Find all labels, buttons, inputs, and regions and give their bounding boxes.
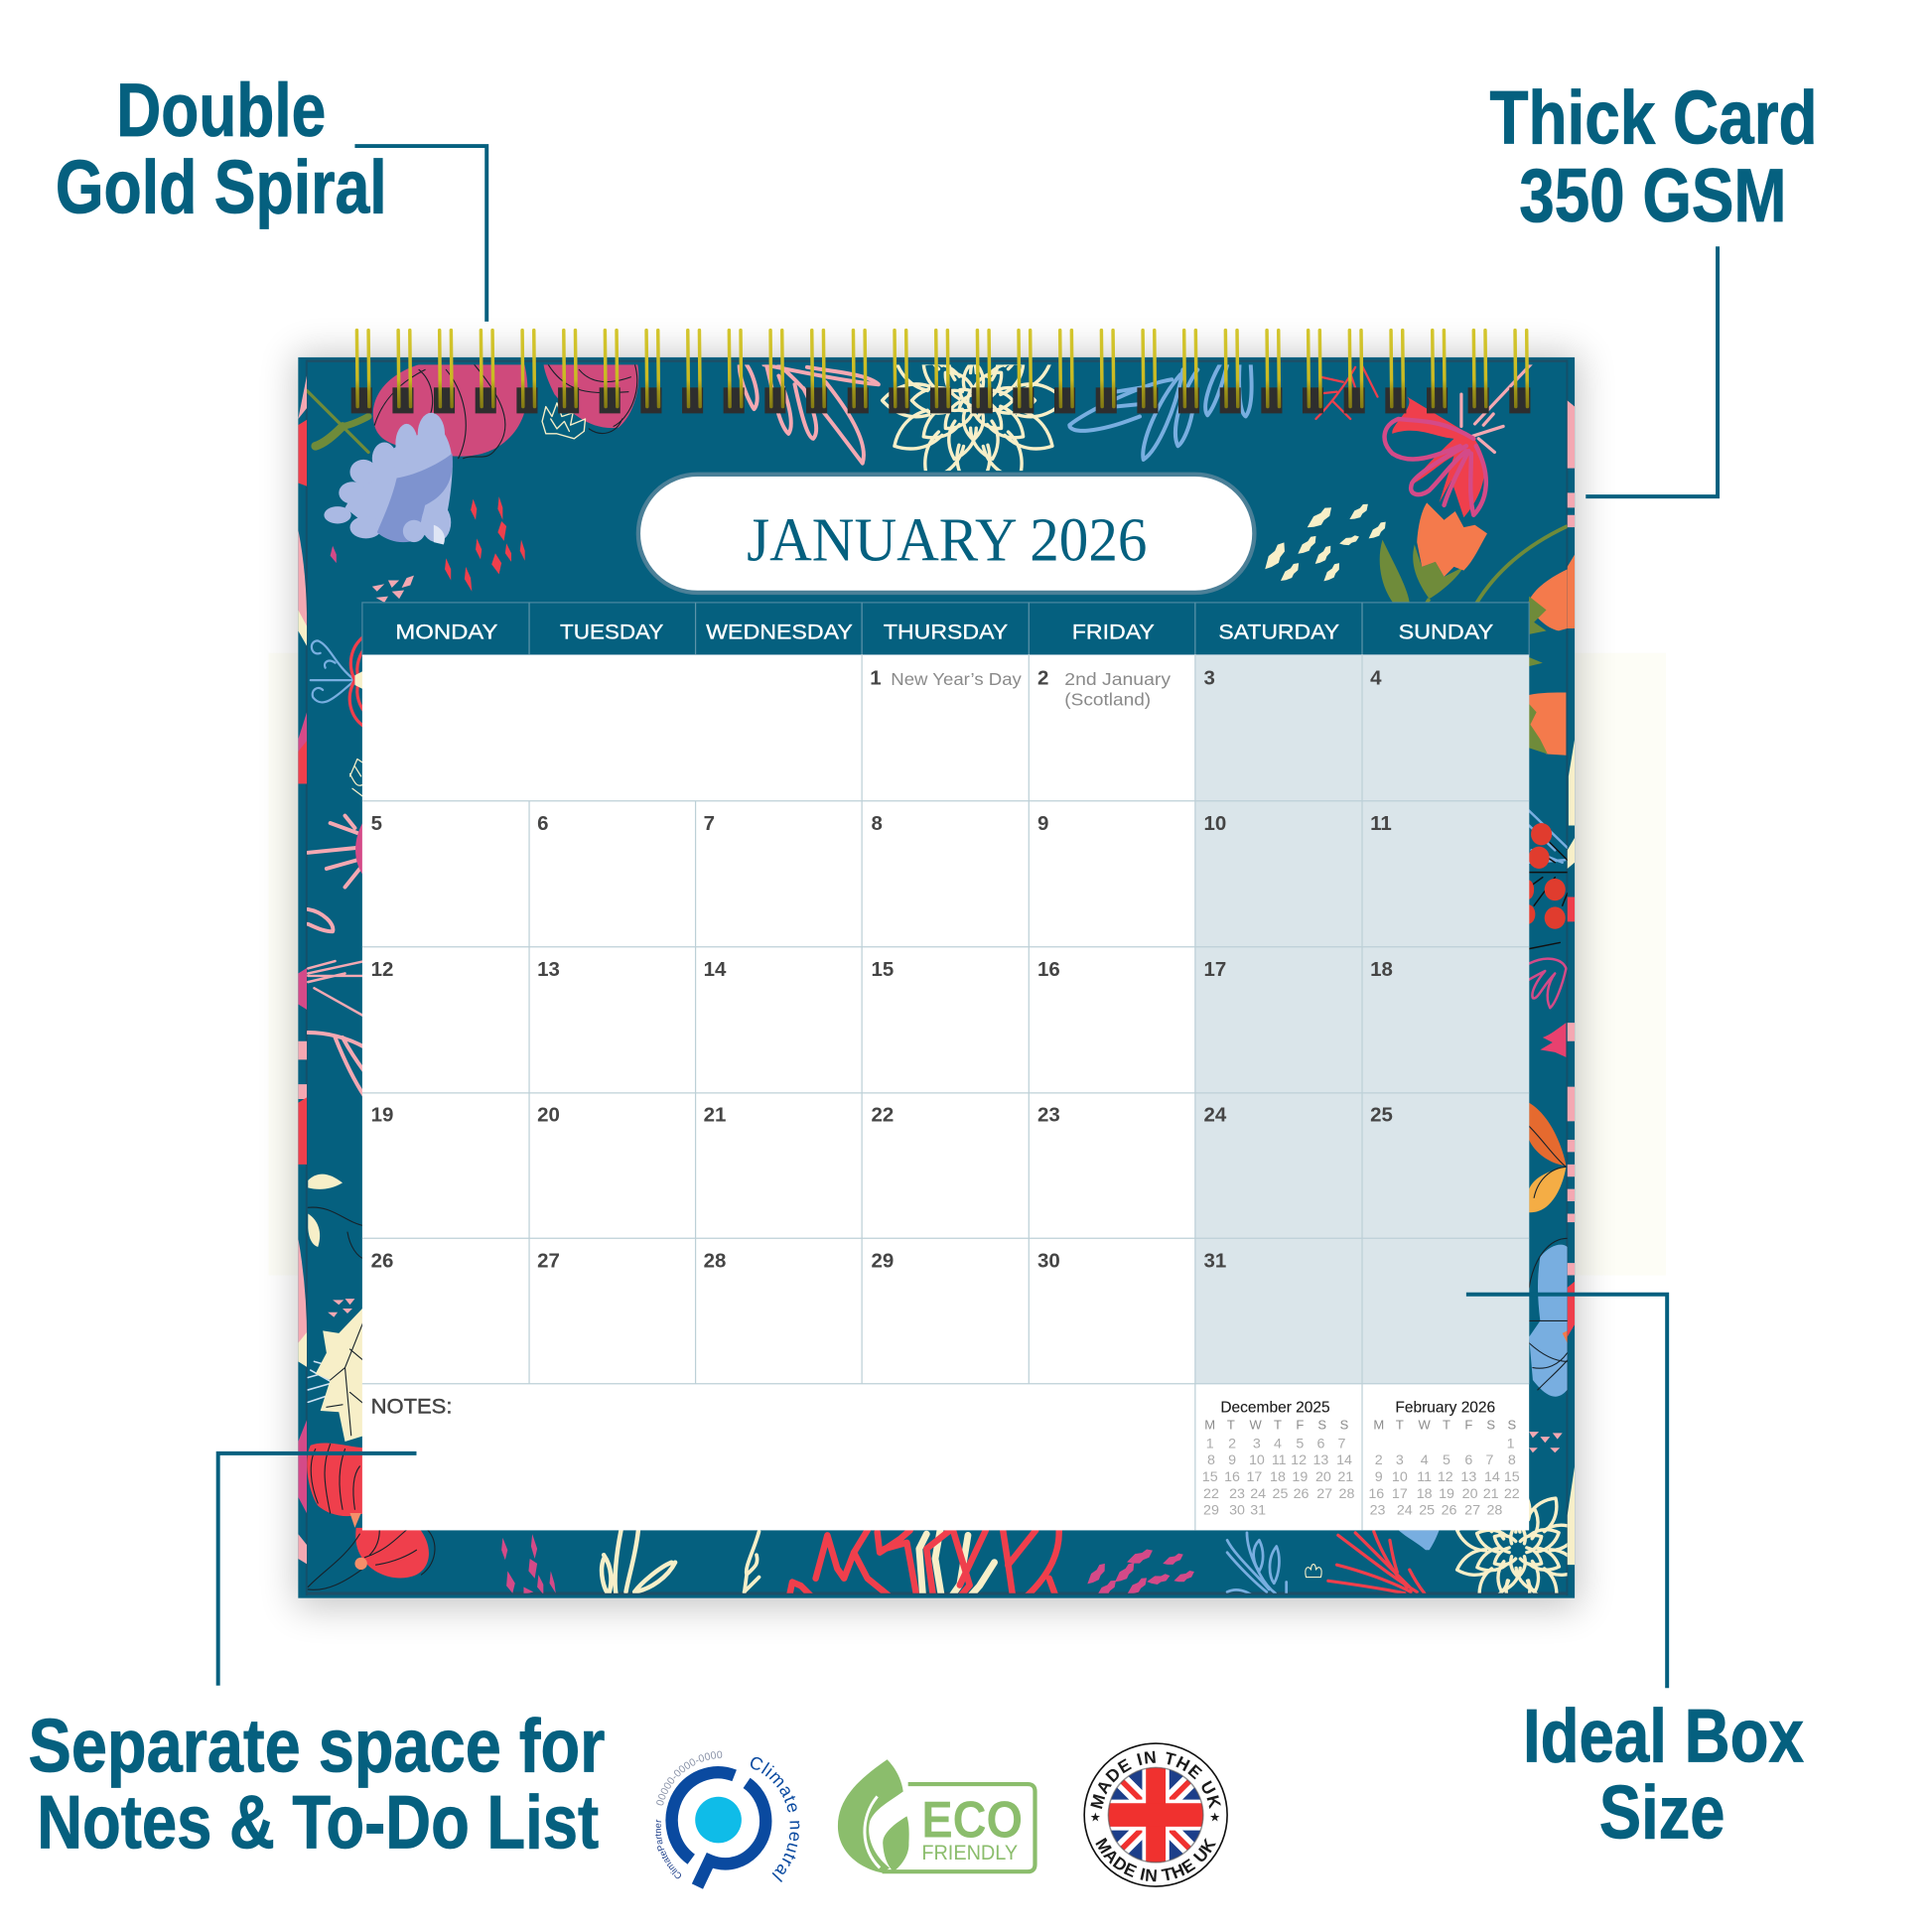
spatter: cream marks <box>1258 503 1389 582</box>
weekday header: TUESDAY <box>560 621 663 643</box>
flower: red and magenta bloom <box>1385 397 1486 517</box>
mini calendar: December 2025: 8 <box>1207 1452 1215 1468</box>
mini calendar: December 2025: 21 <box>1337 1469 1353 1485</box>
badge: climate neutral: ClimatePartner <box>655 1819 681 1878</box>
day numbers: 19 <box>371 1103 393 1126</box>
mini calendar: December 2025: 12 <box>1291 1452 1307 1468</box>
spatter: magenta bottom centre <box>1082 1549 1194 1597</box>
plant: cream sprig bottom <box>745 1532 759 1593</box>
mini calendar: February 2026: 14 <box>1484 1469 1500 1485</box>
plant: blue fern left <box>308 1361 351 1402</box>
mini calendar: February 2026: 22 <box>1504 1486 1520 1502</box>
plant: pink spiky leaves <box>1461 362 1533 452</box>
flag: union jack <box>1103 1762 1208 1867</box>
plant: red berries with blue leaves <box>1520 811 1568 949</box>
mini calendar: December 2025: S <box>1317 1418 1326 1433</box>
mini calendar: February 2026: 3 <box>1396 1452 1404 1468</box>
day numbers: 9 <box>1037 812 1048 835</box>
mini calendar: December 2025: December 2025 <box>1220 1399 1330 1416</box>
mini calendar: December 2025: 10 <box>1249 1452 1265 1468</box>
mini calendar: December 2025: F <box>1296 1418 1304 1433</box>
mini calendar: February 2026: 21 <box>1483 1486 1499 1502</box>
floral illustration <box>307 310 1583 1614</box>
spatter: pink marks <box>372 576 414 603</box>
calendar body <box>298 310 1583 1614</box>
mini calendar: December 2025: 29 <box>1203 1502 1219 1518</box>
day numbers: 15 <box>871 958 894 981</box>
flower: blue petal tip bottom <box>1399 1530 1440 1550</box>
weekday header <box>362 603 1529 655</box>
spatter: red marks <box>445 496 525 592</box>
day numbers: 1 <box>870 666 882 689</box>
mini calendar: December 2025: 22 <box>1203 1486 1219 1502</box>
mini calendar: February 2026: 7 <box>1485 1452 1493 1468</box>
day numbers: 23 <box>1037 1103 1060 1126</box>
mini calendar: December 2025: 28 <box>1339 1486 1354 1502</box>
weekday header: SUNDAY <box>1399 621 1493 643</box>
callout: notes and to-do list: Separate space for <box>29 1705 605 1789</box>
day numbers: 14 <box>704 958 727 981</box>
badge: made in the UK <box>1084 1743 1227 1886</box>
mini calendar: December 2025: 31 <box>1250 1502 1266 1518</box>
day numbers: 12 <box>371 958 393 981</box>
mini calendar: February 2026: 4 <box>1421 1452 1429 1468</box>
mini calendar: February 2026: 13 <box>1460 1469 1476 1485</box>
mini calendar: December 2025: 17 <box>1246 1469 1262 1485</box>
weekday header: SATURDAY <box>1218 621 1339 643</box>
mini calendar: December 2025: 16 <box>1224 1469 1240 1485</box>
mini calendar: December 2025: 26 <box>1294 1486 1310 1502</box>
mini calendar: February 2026: 26 <box>1442 1502 1456 1518</box>
badge: made in the UK: ★ <box>1209 1809 1220 1824</box>
notes label: NOTES: <box>371 1394 452 1419</box>
flower: magenta poppies <box>373 361 638 459</box>
badge: made in the UK: ★ <box>1090 1809 1101 1824</box>
flower: tiny cream lotus <box>1306 1565 1321 1578</box>
plant: left pink sprig <box>308 961 364 1017</box>
plant: green leaf and stem <box>1380 526 1568 617</box>
plant: pink strokes <box>740 364 879 464</box>
day numbers: 5 <box>371 812 382 835</box>
flower: small white chrysanthemum <box>542 403 586 439</box>
date pill <box>638 475 1254 593</box>
callout: ideal box size: Ideal Box <box>1523 1695 1804 1779</box>
badge: eco friendly <box>838 1759 1035 1872</box>
day numbers: 18 <box>1370 958 1393 981</box>
mini calendar: February 2026 <box>1368 1399 1520 1518</box>
day numbers: 8 <box>871 812 883 835</box>
mini calendar: February 2026: W <box>1419 1418 1432 1433</box>
mini calendar: February 2026: 10 <box>1392 1469 1408 1485</box>
callout line: ideal box size <box>1466 1295 1667 1688</box>
mini calendar: December 2025: W <box>1250 1418 1263 1433</box>
day numbers: 25 <box>1370 1103 1393 1126</box>
day numbers: 31 <box>1204 1249 1226 1272</box>
mini calendar: December 2025: 9 <box>1228 1452 1236 1468</box>
badge: climate neutral <box>655 1751 800 1889</box>
calendar cells <box>362 655 1529 1530</box>
mini calendar: February 2026: 18 <box>1417 1486 1433 1502</box>
day numbers: 24 <box>1204 1103 1227 1126</box>
right back-page strip flowers <box>1568 400 1575 1565</box>
day numbers: 26 <box>371 1249 393 1272</box>
mini calendar: February 2026: 6 <box>1464 1452 1472 1468</box>
mini calendar: December 2025: 7 <box>1338 1436 1346 1451</box>
callout: double gold spiral <box>56 69 486 322</box>
day numbers <box>371 666 1393 1272</box>
callout: double gold spiral: Double <box>116 69 326 153</box>
double gold spiral binding <box>351 331 1530 413</box>
plant: left pink star <box>308 816 364 888</box>
day numbers: 30 <box>1037 1249 1060 1272</box>
calendar grid <box>362 603 1529 1530</box>
mini calendar: February 2026: 16 <box>1368 1486 1384 1502</box>
mini calendar: December 2025: 20 <box>1315 1469 1331 1485</box>
flower: red poppy left <box>307 1444 364 1528</box>
flower: orange tulip <box>1413 502 1487 619</box>
pale background band <box>269 653 1666 1276</box>
day numbers: 3 <box>1204 666 1215 689</box>
mini calendar: February 2026: 25 <box>1419 1502 1435 1518</box>
badge: climate neutral: 00000-0000-0000 <box>656 1751 723 1805</box>
holiday labels: (Scotland) <box>1064 690 1151 710</box>
spatter: small pink left <box>328 1299 354 1317</box>
mini calendar: February 2026: 17 <box>1392 1486 1408 1502</box>
callout: ideal box size <box>1523 1695 1804 1856</box>
plant: blue strokes <box>1069 363 1252 460</box>
spatter: magenta bottom left <box>501 1534 556 1594</box>
plant: cream chrysanthemum bottom <box>1453 1486 1583 1614</box>
leaves: orange and yellow <box>1529 1103 1566 1212</box>
day numbers: 28 <box>704 1249 726 1272</box>
mini calendar: February 2026: 11 <box>1417 1469 1432 1485</box>
holiday labels <box>891 669 1171 710</box>
weekday header: MONDAY <box>395 621 497 643</box>
callout line: notes <box>218 1453 416 1686</box>
plant: left pink loop <box>308 909 333 931</box>
badge: made in the UK: MADE IN THE UK <box>1090 1751 1221 1809</box>
holiday labels: New Year’s Day <box>891 669 1022 689</box>
plant: cream chrysanthemum <box>880 364 1054 471</box>
day numbers: 13 <box>537 958 560 981</box>
day numbers: 2 <box>1037 666 1048 689</box>
flower: red poppy bottom <box>308 1528 435 1589</box>
badge: climate neutral: Climate neutral <box>751 1757 800 1882</box>
callout: thick card 350 GSM: 350 GSM <box>1519 154 1787 238</box>
plant: magenta outlined leaves right <box>1529 959 1566 1008</box>
mini calendar: February 2026: 1 <box>1507 1436 1515 1451</box>
day numbers: 22 <box>871 1103 894 1126</box>
mini calendar: December 2025: 2 <box>1228 1436 1236 1451</box>
day numbers: 17 <box>1204 958 1226 981</box>
flower: blue with ink lines <box>1529 1238 1568 1397</box>
badge: made in the UK: MADE IN THE UK <box>1095 1837 1216 1882</box>
day numbers: 27 <box>537 1249 560 1272</box>
mini calendar: December 2025: 30 <box>1229 1502 1245 1518</box>
spatter: magenta mark <box>331 546 337 563</box>
mini calendar: December 2025: 4 <box>1274 1436 1282 1451</box>
card background <box>298 357 1575 1598</box>
mini calendar: December 2025: 5 <box>1296 1436 1304 1451</box>
seeds: cream pods <box>308 1174 364 1259</box>
mini calendar: February 2026: 19 <box>1439 1486 1454 1502</box>
mini calendar: December 2025: T <box>1274 1418 1282 1433</box>
plant: cream leaf strokes bottom <box>602 1530 675 1594</box>
mini calendar: December 2025: T <box>1227 1418 1235 1433</box>
day numbers: 7 <box>704 812 715 835</box>
day numbers: 4 <box>1370 666 1382 689</box>
callout: double gold spiral: Gold Spiral <box>56 146 387 230</box>
plant: red coral <box>789 1530 1059 1596</box>
plant: cream petals in coral <box>919 1530 995 1596</box>
plant: red fern top <box>1313 364 1378 419</box>
mini calendar: February 2026: 2 <box>1375 1452 1383 1468</box>
mini calendar: February 2026: 24 <box>1397 1502 1413 1518</box>
spatter: pink right <box>1529 1432 1563 1452</box>
mini calendar: February 2026: F <box>1464 1418 1472 1433</box>
plant: red fern bottom <box>1328 1532 1425 1593</box>
holiday labels: 2nd January <box>1064 669 1171 689</box>
day numbers: 10 <box>1204 812 1226 835</box>
day numbers: 21 <box>704 1103 726 1126</box>
callout: ideal box size: Size <box>1599 1771 1725 1856</box>
day numbers: 6 <box>537 812 548 835</box>
plant: left pink branch <box>308 1033 364 1097</box>
weekday header: WEDNESDAY <box>706 621 853 643</box>
mini calendar: December 2025: 6 <box>1316 1436 1324 1451</box>
mini calendar: February 2026: S <box>1507 1418 1516 1433</box>
weekday header: FRIDAY <box>1072 621 1155 643</box>
plant: blue fern bottom <box>1227 1533 1287 1594</box>
mini calendar: February 2026: M <box>1373 1418 1384 1433</box>
mini calendar: February 2026: 12 <box>1438 1469 1453 1485</box>
mini calendar: February 2026: 9 <box>1375 1469 1383 1485</box>
mini calendar: December 2025: S <box>1340 1418 1349 1433</box>
badge: eco friendly: FRIENDLY <box>921 1842 1018 1864</box>
mini calendar: December 2025: M <box>1204 1418 1215 1433</box>
mini calendar: December 2025: 25 <box>1273 1486 1288 1502</box>
flower: periwinkle peony <box>324 413 453 545</box>
badge: eco friendly: ECO <box>921 1791 1023 1849</box>
mini calendar: December 2025: 19 <box>1292 1469 1308 1485</box>
left back-page strip flowers <box>298 369 308 1565</box>
mini calendar: December 2025: 18 <box>1270 1469 1286 1485</box>
callout: thick card 350 GSM <box>1489 76 1818 496</box>
callout: notes and to-do list: Notes & To-Do List <box>37 1781 599 1865</box>
mini calendar: February 2026: T <box>1396 1418 1404 1433</box>
calendar shadow <box>296 353 1580 1608</box>
mini calendar: December 2025: 14 <box>1336 1452 1352 1468</box>
day numbers: 20 <box>537 1103 560 1126</box>
mini calendar: February 2026: 27 <box>1464 1502 1480 1518</box>
mini calendar: February 2026: T <box>1443 1418 1450 1433</box>
mini calendar: February 2026: February 2026 <box>1395 1399 1495 1416</box>
month title: JANUARY 2026 <box>747 507 1147 575</box>
callout: thick card 350 GSM: Thick Card <box>1489 76 1818 161</box>
mini calendar: February 2026: 15 <box>1504 1469 1520 1485</box>
day numbers: 29 <box>871 1249 894 1272</box>
plant: green sprig <box>307 390 368 452</box>
mini calendar: December 2025: 24 <box>1250 1486 1266 1502</box>
day numbers: 16 <box>1037 958 1060 981</box>
mini calendar: December 2025: 23 <box>1229 1486 1245 1502</box>
mini calendar: February 2026: 5 <box>1443 1452 1450 1468</box>
plant: cream leaf <box>316 1307 364 1442</box>
mini calendar: December 2025 <box>1202 1399 1354 1518</box>
callout: notes and to-do list <box>29 1705 605 1865</box>
mini calendar: February 2026: 8 <box>1508 1452 1516 1468</box>
mini calendar: December 2025: 1 <box>1206 1436 1214 1451</box>
mini calendar: December 2025: 15 <box>1202 1469 1218 1485</box>
weekday header: THURSDAY <box>884 621 1008 643</box>
day numbers: 11 <box>1370 812 1392 835</box>
flower: orange tulips right <box>1525 569 1568 756</box>
mini calendar: February 2026: 28 <box>1486 1502 1502 1518</box>
mini calendar: February 2026: 20 <box>1462 1486 1478 1502</box>
mini calendar: December 2025: 27 <box>1316 1486 1332 1502</box>
mini calendar: December 2025: 3 <box>1253 1436 1261 1451</box>
mini calendar: February 2026: 23 <box>1370 1502 1386 1518</box>
mini calendar: December 2025: 13 <box>1312 1452 1328 1468</box>
plant: left blue curls and red flower <box>311 635 364 727</box>
mini calendar: December 2025: 11 <box>1272 1452 1287 1468</box>
mini calendar: February 2026: S <box>1486 1418 1495 1433</box>
flower: pink red right <box>1540 1023 1566 1057</box>
plant: left small cream flower <box>349 759 364 796</box>
